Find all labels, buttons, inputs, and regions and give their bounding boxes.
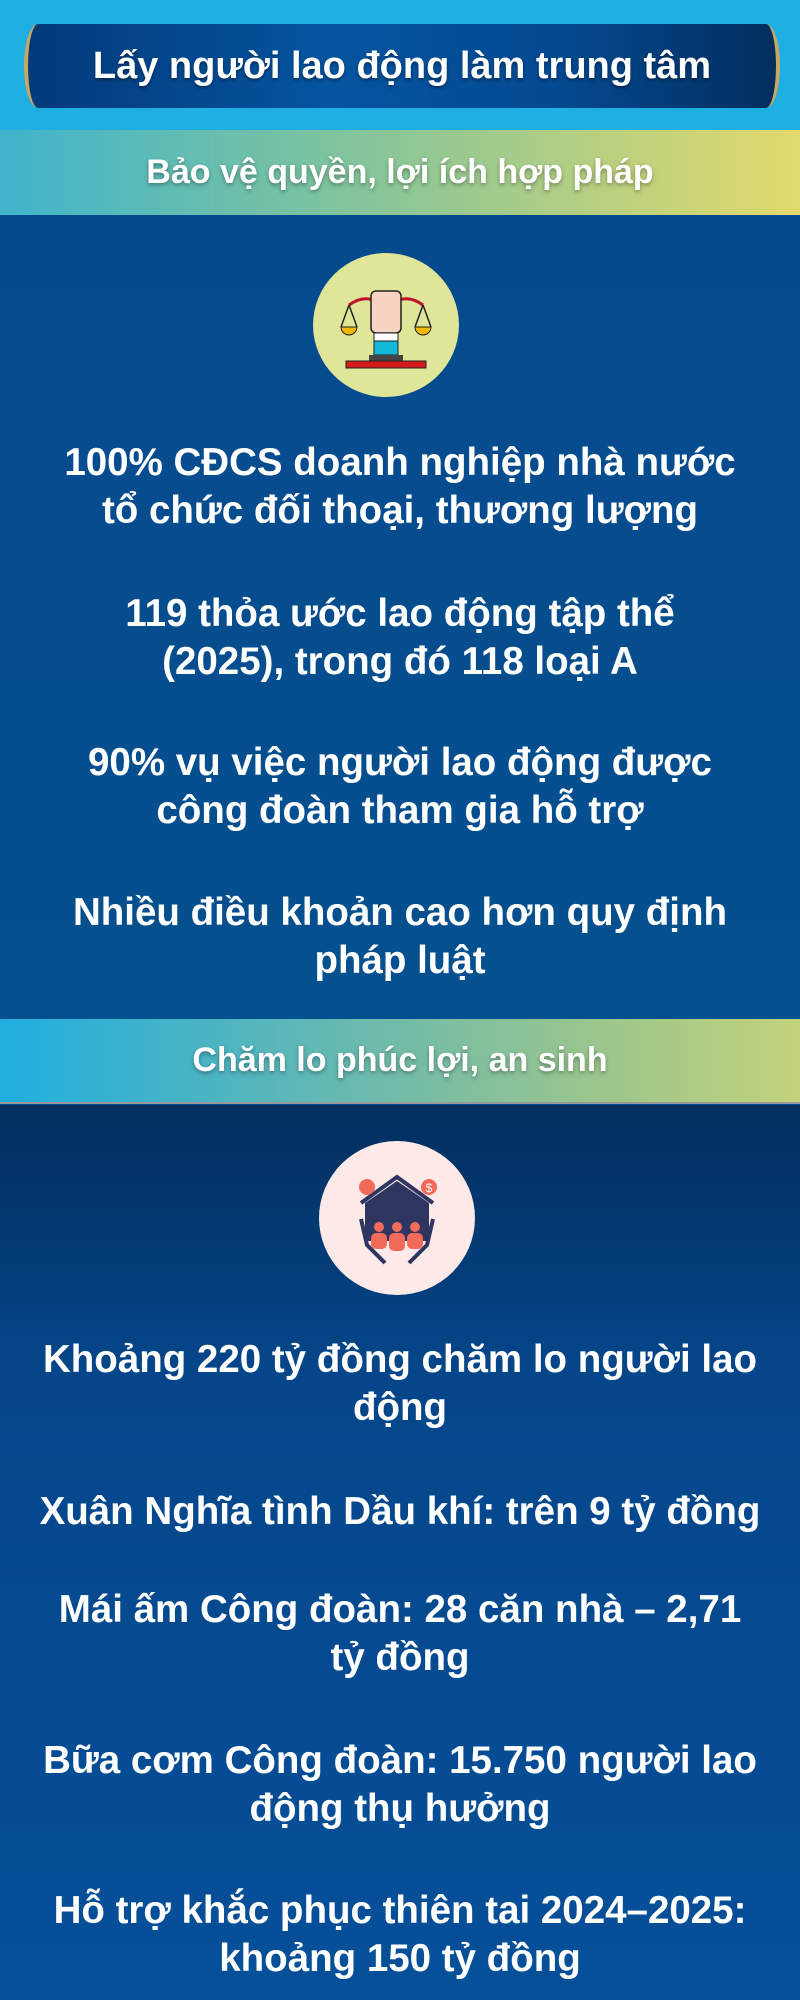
- stat 4: [73, 891, 727, 982]
- section heading 2: Chăm lo phúc lợi, an sinh: [192, 1041, 608, 1079]
- header background: [0, 0, 800, 130]
- stat 9: [54, 1888, 746, 1980]
- title: Lấy người lao động làm trung tâm: [93, 44, 711, 86]
- panel 1: [0, 215, 800, 1019]
- stat 2: 119 thỏa ước lao động tập thể: [125, 592, 675, 635]
- stat 2: (2025), trong đó 118 loại A: [162, 640, 638, 683]
- icon: house care: $: [426, 1181, 433, 1195]
- section heading 1: Bảo vệ quyền, lợi ích hợp pháp: [146, 153, 654, 191]
- stat 5: [43, 1338, 757, 1429]
- section heading 2: [0, 1019, 800, 1104]
- stat 8: động thụ hưởng: [249, 1787, 551, 1830]
- stat 4: pháp luật: [314, 939, 486, 982]
- stat 9: khoảng 150 tỷ đồng: [219, 1937, 581, 1980]
- stat 6: Xuân Nghĩa tình Dầu khí: trên 9 tỷ đồng: [40, 1490, 760, 1533]
- stat 5: động: [353, 1386, 447, 1429]
- stat 1: tổ chức đối thoại, thương lượng: [102, 489, 698, 532]
- stat 3: 90% vụ việc người lao động được: [88, 741, 712, 784]
- stat 7: tỷ đồng: [330, 1636, 470, 1679]
- icon: house care: [319, 1141, 475, 1295]
- stat 7: [59, 1588, 741, 1679]
- section heading 1: [0, 130, 800, 215]
- stat 9: Hỗ trợ khắc phục thiên tai 2024–2025:: [54, 1889, 746, 1932]
- stat 3: [88, 741, 712, 832]
- stat 1: 100% CĐCS doanh nghiệp nhà nước: [64, 441, 736, 484]
- icon: scales hand: [313, 253, 459, 397]
- stat 7: Mái ấm Công đoàn: 28 căn nhà – 2,71: [59, 1588, 741, 1631]
- stat 3: công đoàn tham gia hỗ trợ: [156, 789, 644, 832]
- stat 4: Nhiều điều khoản cao hơn quy định: [73, 891, 727, 934]
- stat 8: [43, 1739, 757, 1830]
- stat 1: [64, 441, 736, 532]
- stat 5: Khoảng 220 tỷ đồng chăm lo người lao: [43, 1338, 757, 1381]
- stat 2: [125, 592, 675, 683]
- panel 2: [0, 1105, 800, 2000]
- title pill: [24, 24, 780, 108]
- stat 8: Bữa cơm Công đoàn: 15.750 người lao: [43, 1739, 757, 1782]
